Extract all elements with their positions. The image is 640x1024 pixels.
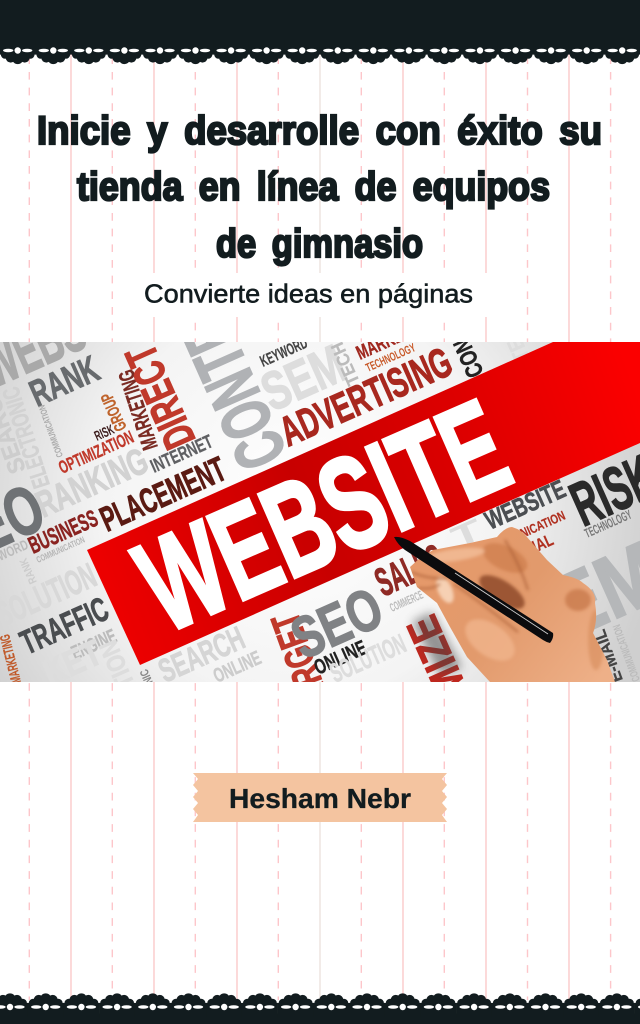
word cloud: NIC (137, 667, 156, 686)
word cloud: COMMUNICATION (35, 535, 86, 565)
word cloud: E-MAIL (590, 627, 627, 685)
word cloud: WEBSITE (480, 474, 570, 535)
word cloud: COMMERCE (388, 588, 425, 615)
word cloud: ENGINE (68, 625, 120, 665)
word cloud: SEM (252, 334, 355, 423)
word cloud: RISK (92, 421, 116, 444)
word cloud: DIRECT (116, 337, 205, 456)
word cloud: UNICATION (511, 508, 567, 544)
bottom lace border (0, 993, 640, 1024)
word cloud: MIZE (398, 608, 477, 706)
word cloud: BUSINESS (24, 505, 102, 559)
word cloud: CON (449, 334, 489, 382)
word cloud: TECHNOLOGY (364, 340, 418, 375)
word cloud: ADVERTISING (273, 338, 459, 455)
top lace border (0, 0, 640, 64)
word cloud: SEO (282, 575, 392, 672)
title: tienda en línea de equipos (77, 165, 550, 209)
word cloud: MARKETING (113, 367, 163, 453)
word cloud: COMMUNICATION (37, 404, 65, 459)
word cloud: KEYWORD (258, 335, 310, 371)
word cloud: INTERNET (147, 431, 217, 478)
subtitle panel (132, 273, 492, 317)
word cloud: TECH (327, 339, 364, 389)
word cloud: RANK (18, 556, 40, 586)
author ribbon (193, 773, 447, 822)
word cloud: SALES (369, 537, 451, 605)
word cloud (0, 342, 640, 682)
red band (87, 342, 640, 665)
word cloud: SEARCH (153, 619, 250, 689)
word cloud: TION (93, 636, 140, 694)
title (37, 109, 602, 266)
title: de gimnasio (216, 222, 423, 266)
word cloud: PLACEMENT (94, 450, 232, 539)
word cloud: ONLINE (210, 647, 265, 688)
word cloud: RANK (24, 348, 105, 414)
word cloud: RANKING (30, 440, 154, 525)
finger and palm shading (411, 537, 604, 670)
word cloud: TRAFFIC (15, 590, 114, 662)
subtitle panel: Convierte ideas en páginas (144, 278, 473, 308)
word cloud: OPTIMIZATION (55, 427, 137, 478)
hand holding a pen (394, 527, 615, 682)
author ribbon: Hesham Nebr (229, 783, 411, 814)
word cloud: ONLINE (311, 636, 370, 680)
word cloud: TARGET (263, 607, 342, 725)
photo: website word cloud with hand (0, 342, 640, 682)
word cloud: MARKETING (353, 312, 435, 365)
word cloud: CONTENT (143, 252, 302, 481)
word cloud: SOLUTION (325, 629, 411, 688)
word cloud: NAL (524, 530, 556, 559)
word cloud: GROUP (97, 390, 131, 434)
hand shadow (412, 612, 462, 675)
word cloud: KET (37, 631, 108, 693)
pen (394, 537, 553, 643)
word cloud: T (446, 513, 487, 555)
title: Inicie y desarrolle con éxito su (37, 109, 602, 153)
word cloud: TE (502, 334, 535, 366)
